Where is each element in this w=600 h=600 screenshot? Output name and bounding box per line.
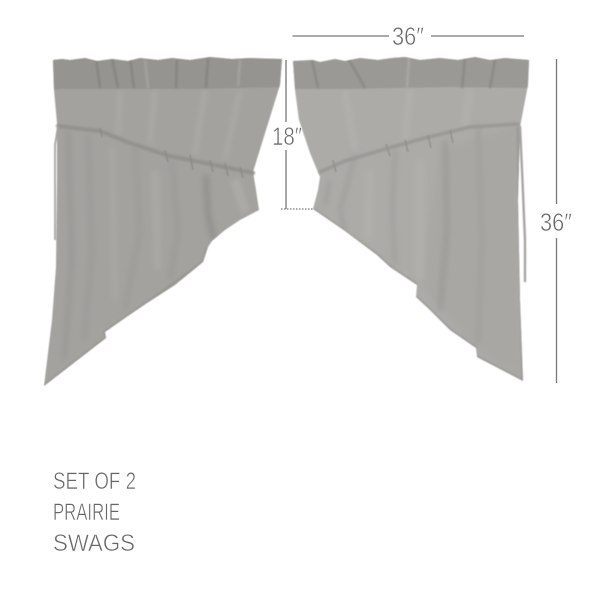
left hem shading (44, 247, 208, 386)
right hem shading (313, 127, 523, 381)
dimension: drop 18 inches: 18″ (272, 123, 302, 151)
right gather ruffle (320, 124, 518, 172)
left tie (55, 126, 58, 240)
product caption (53, 468, 136, 557)
left header band (50, 55, 285, 90)
right header band (290, 55, 532, 89)
right swag curtain (285, 50, 535, 390)
left swag curtain (40, 50, 290, 390)
left gather ruffle (58, 126, 253, 173)
dimension: top width 36 inches: 36″ (392, 23, 424, 51)
dimension: length 36 inches: 36″ (540, 209, 572, 237)
product caption: PRAIRIE (53, 499, 120, 526)
product diagram (44, 27, 572, 551)
product caption: SET OF 2 (53, 468, 136, 495)
left gather ticks (100, 128, 243, 178)
right tie (520, 126, 525, 282)
product caption: SWAGS (53, 530, 135, 557)
right gather ticks (333, 130, 453, 172)
